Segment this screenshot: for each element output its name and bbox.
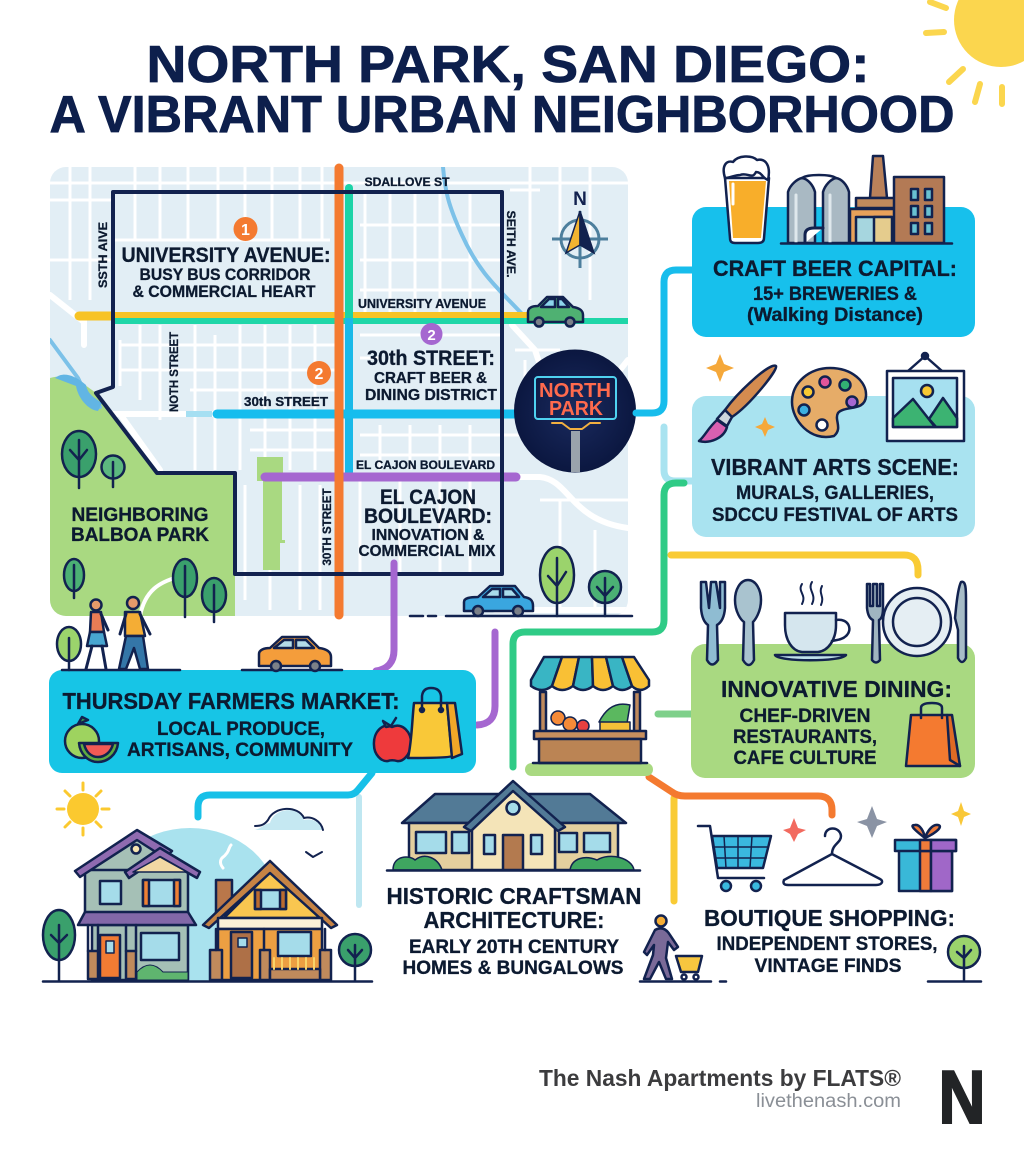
illustration: park figures and street (57, 431, 632, 671)
icon: plate and knife (883, 582, 966, 662)
map labels: NOTH STREET (167, 331, 181, 412)
number markers: 1 (241, 222, 250, 239)
text block: University Avenue: UNIVERSITY AVENUE: (122, 244, 330, 267)
icon: blue car (464, 586, 533, 616)
text block: Neighboring Balboa Park (71, 505, 209, 546)
icon: sparkle red (783, 818, 806, 842)
icon: framed picture (887, 353, 964, 441)
panel: neighborhood map (50, 160, 628, 616)
panel: vibrant arts scene: SDCCU FESTIVAL OF ARTS (712, 505, 958, 526)
panel: innovative dining (691, 580, 975, 778)
text block: University Avenue (122, 244, 330, 301)
icon: small sun (57, 783, 109, 835)
icon: clothes hanger (783, 828, 882, 885)
panel: innovative dining: INNOVATIVE DINING: (721, 676, 952, 702)
panel: vibrant arts scene: MURALS, GALLERIES, (736, 483, 934, 504)
map labels: 30TH STREET (320, 488, 334, 566)
text block: 30th Street: CRAFT BEER & (374, 370, 487, 387)
icon: sun top right (926, 0, 1024, 104)
panel: thursday farmers market: LOCAL PRODUCE, (157, 719, 325, 740)
text block: El Cajon Boulevard: EL CAJON (380, 486, 476, 509)
icon: palette (792, 368, 866, 437)
panel: vibrant arts scene: VIBRANT ARTS SCENE: (711, 454, 959, 480)
icon: brewery tanks and building (781, 156, 952, 244)
faded cyan stub (186, 411, 212, 417)
icon: orange car (259, 637, 331, 671)
text block: Neighboring Balboa Park: NEIGHBORING (72, 505, 208, 526)
icon: shopper with cart (640, 916, 726, 982)
panel: craft beer capital: (Walking Distance) (747, 305, 923, 326)
street grid (50, 160, 628, 610)
route lines on map (79, 168, 628, 615)
icon: sparkle yellow (951, 802, 971, 826)
text block: University Avenue: & COMMERCIAL HEART (132, 282, 316, 301)
icon: compass (552, 189, 608, 268)
icon: sparkle grey (857, 806, 887, 838)
text block: historic craftsman architecture: ARCHITECTURE: (424, 907, 604, 933)
icon: lime and watermelon (65, 717, 118, 762)
logo: N: N (938, 1055, 986, 1139)
panel: thursday farmers market: THURSDAY FARMERS MARKET: (62, 688, 400, 714)
icon: coffee cup (775, 582, 849, 660)
icon: paint brush (699, 366, 776, 442)
text block: boutique shopping: BOUTIQUE SHOPPING: (704, 905, 955, 931)
icon: cloud and bird (255, 809, 323, 857)
panel: craft beer capital (692, 156, 975, 337)
panel: vibrant arts scene (692, 353, 975, 537)
map labels (96, 175, 518, 566)
icon: small tree (928, 936, 981, 982)
panel: craft beer capital: CRAFT BEER CAPITAL: (713, 256, 957, 281)
text block: boutique shopping: VINTAGE FINDS (754, 956, 902, 977)
icon: North Park neon sign (514, 350, 636, 472)
text block: El Cajon Boulevard: BOULEVARD: (364, 505, 492, 528)
text block: historic craftsman architecture: HISTORIC CRAFTSMAN (386, 883, 642, 909)
text block: Neighboring Balboa Park: BALBOA PARK (71, 525, 209, 546)
text block: boutique shopping (704, 905, 955, 977)
icon: spoon (735, 580, 761, 665)
map labels: UNIVERSITY AVENUE (358, 296, 486, 311)
icon: apple (374, 718, 411, 761)
text block: El Cajon Boulevard (358, 486, 496, 560)
balboa park (50, 376, 235, 616)
icon: compass: N (573, 189, 587, 210)
icon: trees by homes (43, 910, 372, 982)
text block: historic craftsman architecture: HOMES & BUNGALOWS (402, 958, 624, 979)
map labels: SDALLOVE ST (364, 175, 450, 189)
text block: historic craftsman architecture: EARLY 20TH CENTURY (409, 937, 619, 958)
thicker roads (50, 295, 628, 610)
neighborhood boundary (96, 192, 502, 574)
rivers (443, 167, 523, 315)
text block: 30th Street: 30th STREET: (367, 347, 495, 370)
awning stripes and scallops (531, 657, 562, 690)
illustration: historic house (387, 781, 640, 870)
icon: yellow shopping bag (408, 688, 462, 758)
footer credit (539, 1065, 901, 1112)
illustration: craftsman homes (43, 783, 372, 982)
icon: green car (528, 297, 583, 326)
map labels: SSTH AIVE (96, 222, 110, 288)
icon: shopping cart (698, 826, 771, 891)
title: A VIBRANT URBAN NEIGHBORHOOD (50, 86, 954, 144)
icon: walking people (86, 597, 150, 669)
icon: North Park neon sign: NORTH (539, 380, 611, 402)
icon: fork two (867, 584, 883, 662)
connector lines (198, 270, 918, 905)
icon: orange shopping bag (906, 703, 960, 766)
panel: innovative dining: CAFE CULTURE (734, 748, 876, 769)
map labels: SEITH AVE. (504, 210, 518, 278)
icon: North Park neon sign: PARK (549, 398, 604, 420)
icon: green two-storey house (75, 830, 200, 980)
number markers: 2 (427, 327, 436, 344)
boutique shopping icons (698, 802, 971, 891)
panel: innovative dining: RESTAURANTS, (733, 727, 877, 748)
icon: market stall (525, 657, 653, 776)
footer credit: The Nash Apartments by FLATS® (539, 1065, 901, 1091)
icon: sparkles (706, 354, 775, 437)
number markers (234, 217, 442, 385)
panel: thursday farmers market: ARTISANS, COMMUNITY (127, 740, 353, 761)
title: NORTH PARK, SAN DIEGO: (146, 36, 869, 94)
text block: El Cajon Boulevard: COMMERCIAL MIX (358, 543, 496, 560)
map labels: 30th STREET (244, 394, 328, 409)
icon: park trees (57, 431, 621, 670)
icon: fork (701, 582, 725, 664)
panel: innovative dining: CHEF-DRIVEN (740, 706, 870, 727)
text block: El Cajon Boulevard: INNOVATION & (372, 527, 485, 544)
text block: 30th Street: DINING DISTRICT (365, 387, 497, 404)
panel: craft beer capital: 15+ BREWERIES & (753, 284, 917, 305)
text block: boutique shopping: INDEPENDENT STORES, (716, 934, 938, 955)
map labels: EL CAJON BOULEVARD (356, 458, 495, 472)
text block: 30th Street (365, 347, 497, 404)
icon: beer glass (724, 156, 769, 243)
icon: gift box (895, 825, 956, 891)
icon: yellow bungalow (203, 845, 337, 980)
panel: thursday farmers market (49, 670, 476, 773)
text block: historic craftsman architecture (386, 883, 642, 979)
text block: University Avenue: BUSY BUS CORRIDOR (140, 265, 310, 284)
footer credit: livethenash.com (756, 1091, 901, 1112)
number markers: 2 (315, 366, 324, 383)
title (50, 36, 954, 144)
